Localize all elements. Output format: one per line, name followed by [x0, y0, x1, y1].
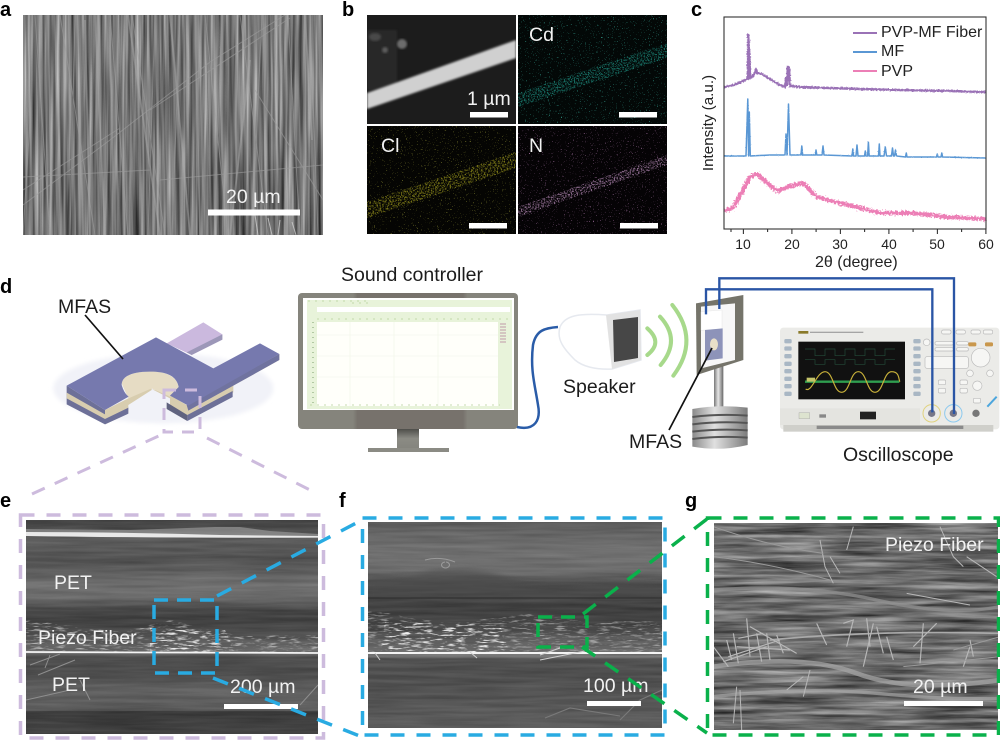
label: speaker: Speaker [563, 376, 636, 398]
legend [853, 24, 983, 80]
curve: PVP [724, 174, 986, 219]
layers [67, 386, 105, 424]
panel f labels: 100 µm [583, 675, 648, 697]
tile: Cl map: Cl [381, 135, 399, 157]
legend: PVP [881, 63, 913, 80]
y axis title: Intensity (a.u.) [700, 75, 717, 171]
x tick labels: 40 [881, 236, 897, 252]
leader line MFAS: MFAS [58, 296, 111, 318]
top face [67, 337, 279, 410]
speaker cable [517, 327, 558, 428]
zoom box in f [538, 617, 587, 647]
signal wires [706, 278, 954, 414]
test stand [692, 295, 748, 449]
panel e labels [38, 572, 298, 709]
panel e: cross-section SEM [26, 520, 318, 734]
label and leader: MFAS on stand: MFAS [629, 431, 682, 453]
speaker [559, 310, 641, 369]
scale bar a: 20 µm [226, 186, 281, 208]
back tab [167, 322, 222, 355]
tile: N map [518, 126, 667, 234]
tile: Cl map [367, 126, 516, 234]
label: sound controller: Sound controller [341, 264, 484, 286]
panel label e: e [0, 490, 11, 512]
scale bar a [208, 186, 300, 216]
x tick labels: 50 [929, 236, 945, 252]
frame e [20, 515, 324, 738]
oscilloscope [780, 328, 999, 432]
panel label d: d [0, 276, 12, 298]
tile: electron image: 1 µm [467, 88, 511, 110]
legend: MF [881, 43, 904, 60]
panel c: XRD chart [700, 17, 994, 271]
panel f: magnified SEM [368, 522, 662, 728]
x tick labels: 60 [978, 236, 994, 252]
panel e labels: 200 µm [230, 676, 295, 698]
panel e labels: Piezo Fiber [38, 627, 137, 649]
panel g labels: 20 µm [913, 676, 968, 698]
sound waves [647, 305, 686, 376]
x tick labels: 10 [735, 236, 751, 252]
curve: PVP-MF Fiber [724, 35, 986, 92]
tile: Cd map [518, 15, 667, 124]
x tick labels: 30 [832, 236, 848, 252]
zoom box in e [154, 600, 217, 673]
panel g labels [885, 534, 984, 706]
connector lines f to g [582, 519, 707, 733]
tile: N map: N [529, 135, 543, 157]
label: oscilloscope: Oscilloscope [843, 444, 954, 466]
axes [724, 17, 986, 234]
monitor [298, 293, 518, 452]
panel e labels: PET [54, 572, 92, 594]
panel b: EDS maps [367, 15, 667, 234]
callout lines to panel e [32, 434, 318, 494]
panel d: MFAS device [53, 322, 279, 424]
zoom box on device [164, 390, 200, 432]
panel label f: f [339, 490, 346, 512]
frame g [708, 518, 998, 735]
panel g: high-magnification SEM [713, 523, 1000, 730]
leader line MFAS [58, 296, 123, 359]
x tick labels [735, 236, 994, 252]
cut-out [122, 372, 179, 398]
label and leader: MFAS on stand [629, 348, 712, 453]
panel e labels: PET [52, 674, 90, 696]
tile: Cd map: Cd [529, 24, 554, 46]
x axis title: 2θ (degree) [815, 254, 898, 271]
panel a: SEM image of aligned fibers [23, 15, 323, 235]
legend: PVP-MF Fiber [881, 24, 983, 41]
panel g labels: Piezo Fiber [885, 534, 984, 556]
curve: MF [724, 99, 986, 158]
connector lines e to f [213, 520, 362, 737]
frame f [362, 518, 665, 735]
x tick labels: 20 [784, 236, 800, 252]
tile: electron image [367, 15, 516, 124]
panel label g: g [685, 490, 697, 512]
